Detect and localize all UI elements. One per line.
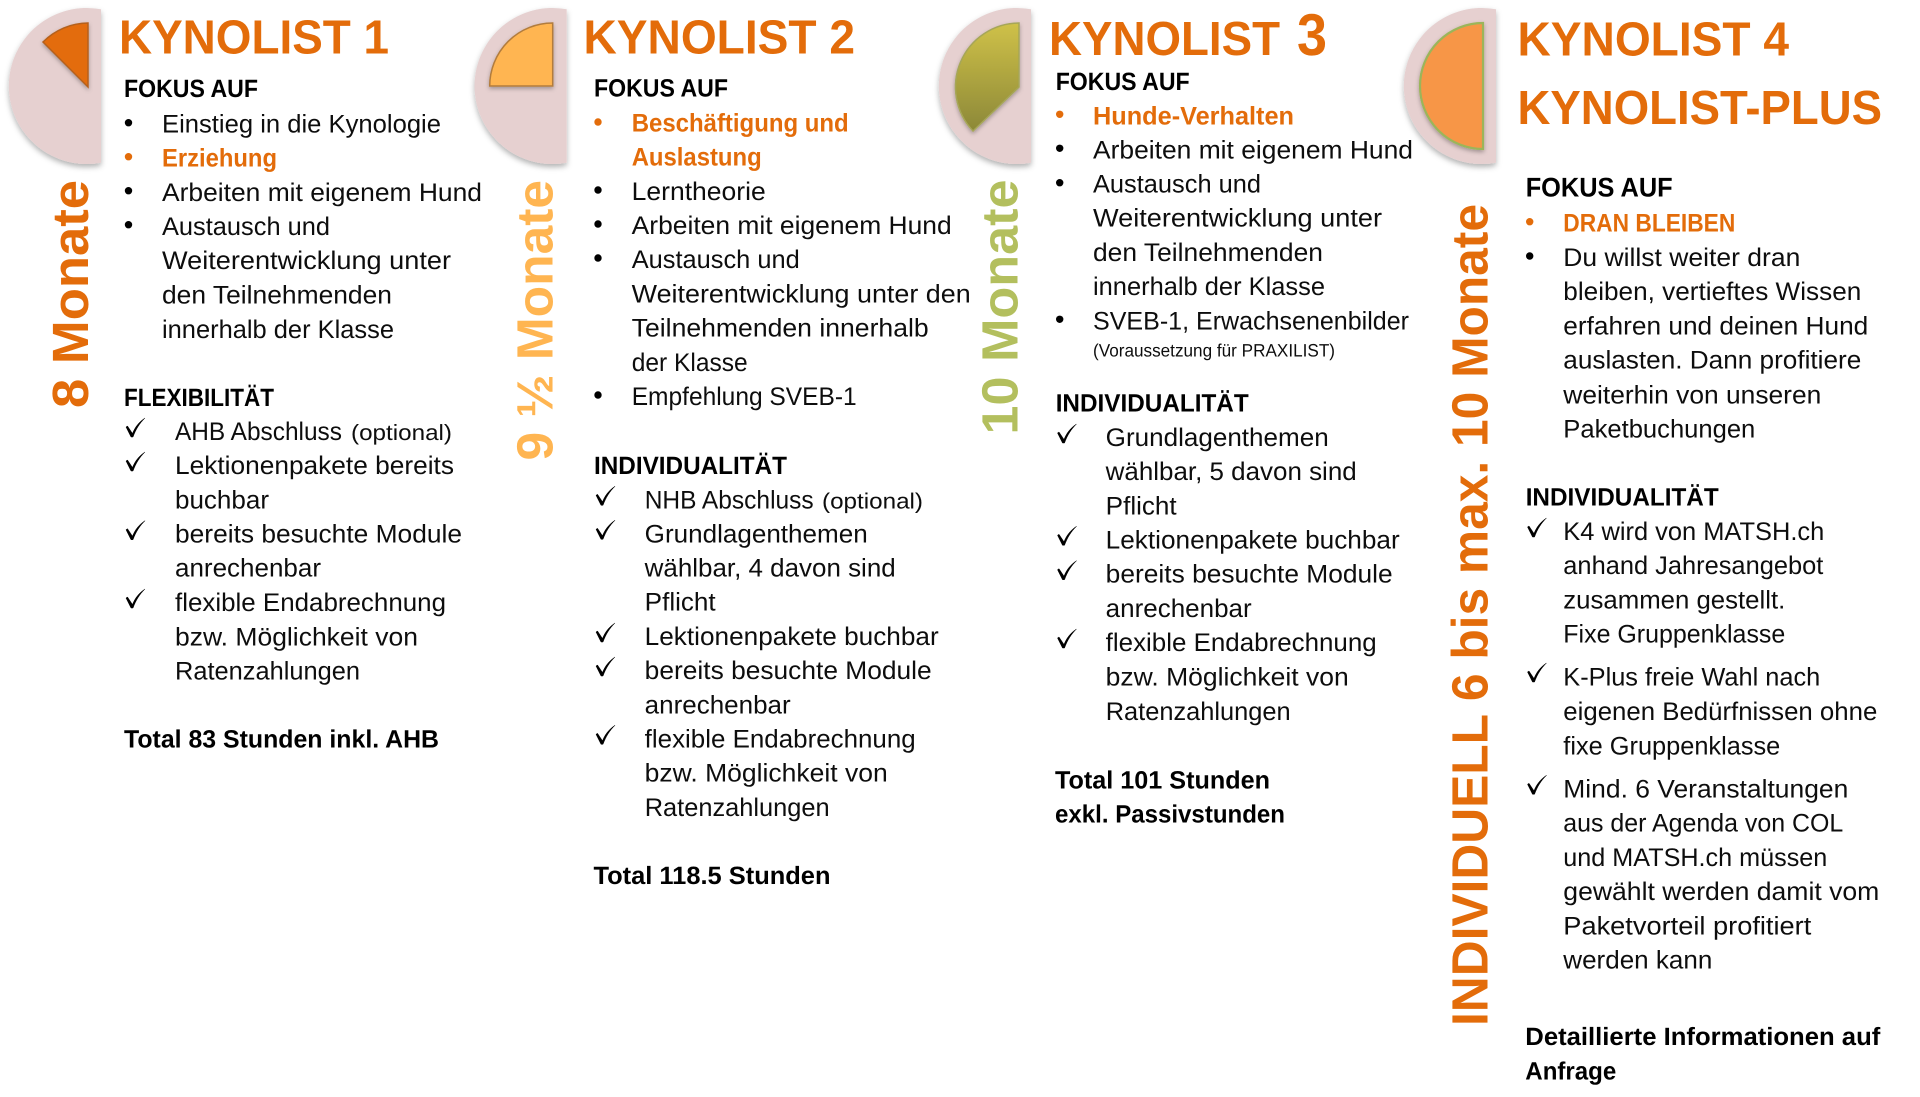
checklist: Individualität: K-Plus freie Wahl nach <box>1563 664 1820 692</box>
title: Kynolist 1: KYNOLIST 1 <box>119 12 389 64</box>
heading: Individualität: INDIVIDUALITÄT <box>1526 484 1719 512</box>
list: Fokus: Weiterentwicklung unter <box>1093 205 1383 233</box>
checklist: Flexibilität: bzw. Möglichkeit von <box>175 624 418 652</box>
title: Kynolist 3: 3 <box>1297 2 1327 68</box>
icon: pie 9.5 months <box>475 8 567 164</box>
list: Fokus <box>1056 102 1413 361</box>
list: Fokus: erfahren und deinen Hund <box>1563 312 1868 340</box>
list: Fokus: bleiben, vertieftes Wissen <box>1563 278 1861 306</box>
checklist: Individualität: bereits besuchte Module <box>645 657 932 685</box>
checklist: Flexibilität: bereits besuchte Module <box>175 521 462 549</box>
title: Kynolist 2: KYNOLIST 2 <box>584 12 855 64</box>
checklist: Individualität: (optional) <box>822 488 923 513</box>
list: Fokus: Paketbuchungen <box>1563 415 1755 443</box>
list: Fokus: Erziehung <box>162 144 277 172</box>
checklist: Individualität: gewählt werden damit vom <box>1563 878 1879 906</box>
list: Fokus: Arbeiten mit eigenem Hund <box>632 212 952 240</box>
list: Fokus: der Klasse <box>632 349 748 377</box>
list: Fokus: den Teilnehmenden <box>1093 239 1323 267</box>
icon: pie 10 months <box>939 8 1031 164</box>
total: 101 Stunden: Total 101 Stunden <box>1055 766 1270 794</box>
checklist: Individualität: Fixe Gruppenklasse <box>1563 621 1785 649</box>
list: Fokus: (Voraussetzung für PRAXILIST) <box>1093 341 1335 361</box>
list: Fokus: Austausch und <box>162 213 330 241</box>
checklist: Individualität: wählbar, 5 davon sind <box>1105 458 1357 486</box>
list: Fokus <box>594 110 971 411</box>
heading: Individualität: INDIVIDUALITÄT <box>594 452 787 480</box>
checklist: Flexibilität: flexible Endabrechnung <box>175 589 446 617</box>
checklist: Flexibilität: anrechenbar <box>175 555 322 583</box>
panel: Kynolist 4 and Kynolist-Plus <box>1404 8 1882 1085</box>
list: Fokus: DRAN BLEIBEN <box>1563 210 1735 238</box>
checklist: Flexibilität: AHB Abschluss <box>175 418 342 446</box>
list: Fokus: Auslastung <box>632 144 762 172</box>
icon: pie 8 months <box>9 8 101 164</box>
checklist: Individualität <box>1528 518 1879 974</box>
note: detailed information: Anfrage <box>1525 1057 1616 1085</box>
panel: Kynolist 3 <box>939 2 1413 829</box>
checklist: Individualität: bereits besuchte Module <box>1106 561 1393 589</box>
duration: 9 1/2 Monate: 9 ½ Monate <box>507 180 564 460</box>
checklist: Individualität: Lektionenpakete buchbar <box>645 623 939 651</box>
list: Fokus: Hunde-Verhalten <box>1093 102 1294 130</box>
total: 101 Stunden <box>1055 766 1285 829</box>
duration: individuell 6 bis max. 10 Monate: INDIVIDUELL 6 bis max. 10 Monate <box>1442 204 1499 1026</box>
checklist: Flexibilität: buchbar <box>175 487 270 515</box>
checklist: Individualität: aus der Agenda von COL <box>1563 810 1843 838</box>
checklist: Flexibilität: Ratenzahlungen <box>175 658 360 686</box>
checklist: Individualität: wählbar, 4 davon sind <box>644 555 896 583</box>
checklist: Flexibilität <box>126 418 462 686</box>
panel: Kynolist 1 <box>9 8 482 754</box>
list: Fokus: Teilnehmenden innerhalb <box>632 315 929 343</box>
title: Kynolist 4 / Kynolist-Plus <box>1518 14 1882 135</box>
total: 101 Stunden: exkl. Passivstunden <box>1055 801 1285 829</box>
list: Fokus: Einstieg in die Kynologie <box>162 110 441 138</box>
note: detailed information: Detaillierte Informationen auf <box>1525 1023 1881 1051</box>
icon: half pie individual <box>1404 8 1496 164</box>
list: Fokus: weiterhin von unseren <box>1562 381 1821 409</box>
list: Fokus: Beschäftigung und <box>632 110 849 138</box>
list: Fokus: Arbeiten mit eigenem Hund <box>162 179 482 207</box>
heading: Flexibilität: FLEXIBILITÄT <box>124 384 274 412</box>
title: Kynolist 4 / Kynolist-Plus: KYNOLIST-PLUS <box>1518 82 1882 135</box>
heading: Fokus auf: FOKUS AUF <box>594 75 728 103</box>
checklist: Flexibilität: Lektionenpakete bereits <box>175 452 454 480</box>
checklist: Individualität: K4 wird von MATSH.ch <box>1563 518 1824 546</box>
checklist: Individualität: eigenen Bedürfnissen ohne <box>1563 698 1877 726</box>
note: detailed information <box>1525 1023 1881 1085</box>
checklist: Individualität: bzw. Möglichkeit von <box>645 760 888 788</box>
total: 83 Stunden: Total 83 Stunden inkl. AHB <box>124 726 439 754</box>
checklist: Individualität <box>1058 424 1400 726</box>
list: Fokus: Austausch und <box>1093 171 1261 199</box>
total: 118.5 Stunden: Total 118.5 Stunden <box>594 862 830 890</box>
checklist: Individualität: fixe Gruppenklasse <box>1563 732 1780 760</box>
list: Fokus: Weiterentwicklung unter <box>162 247 452 275</box>
checklist: Individualität: Lektionenpakete buchbar <box>1106 526 1400 554</box>
list: Fokus: Weiterentwicklung unter den <box>632 281 971 309</box>
checklist: Individualität: und MATSH.ch müssen <box>1563 844 1827 872</box>
list: Fokus: Du willst weiter dran <box>1563 244 1800 272</box>
checklist: Individualität: Mind. 6 Veranstaltungen <box>1563 775 1848 803</box>
checklist: Individualität: Grundlagenthemen <box>1106 424 1329 452</box>
list: Fokus: Empfehlung SVEB-1 <box>632 383 857 411</box>
checklist: Individualität: bzw. Möglichkeit von <box>1106 663 1349 691</box>
list: Fokus: Arbeiten mit eigenem Hund <box>1093 136 1413 164</box>
checklist: Individualität: flexible Endabrechnung <box>645 725 916 753</box>
checklist: Individualität: flexible Endabrechnung <box>1106 629 1377 657</box>
list: Fokus: Lerntheorie <box>632 178 766 206</box>
heading: Individualität: INDIVIDUALITÄT <box>1056 390 1249 418</box>
checklist: Individualität <box>596 486 939 822</box>
list: Fokus: innerhalb der Klasse <box>162 316 394 344</box>
checklist: Individualität: anrechenbar <box>1106 595 1252 623</box>
checklist: Individualität: anhand Jahresangebot <box>1563 552 1823 580</box>
heading: Fokus auf: FOKUS AUF <box>1526 173 1673 203</box>
panel: Kynolist 2 <box>475 8 971 890</box>
checklist: Individualität: Grundlagenthemen <box>645 520 868 548</box>
title: Kynolist 4 / Kynolist-Plus: KYNOLIST 4 <box>1518 14 1789 66</box>
checklist: Flexibilität: (optional) <box>351 420 452 445</box>
list: Fokus: den Teilnehmenden <box>162 282 392 310</box>
checklist: Individualität: Pflicht <box>645 589 716 617</box>
checklist: Individualität: anrechenbar <box>645 691 791 719</box>
list: Fokus: Austausch und <box>632 246 800 274</box>
duration: 8 Monate: 8 Monate <box>42 180 99 408</box>
checklist: Individualität: zusammen gestellt. <box>1563 586 1785 614</box>
duration: 10 Monate: 10 Monate <box>972 180 1029 434</box>
checklist: Individualität: Paketvorteil profitiert <box>1563 912 1811 940</box>
list: Fokus: auslasten. Dann profitiere <box>1563 346 1861 374</box>
list: Fokus: innerhalb der Klasse <box>1093 273 1325 301</box>
list: Fokus <box>125 110 482 344</box>
checklist: Individualität: Pflicht <box>1106 492 1177 520</box>
checklist: Individualität: werden kann <box>1562 946 1712 974</box>
list: Fokus <box>1526 210 1868 443</box>
checklist: Individualität: NHB Abschluss <box>645 486 814 514</box>
heading: Fokus auf: FOKUS AUF <box>1056 68 1190 96</box>
title: Kynolist 3: KYNOLIST <box>1049 13 1280 66</box>
list: Fokus: SVEB-1, Erwachsenenbilder <box>1093 307 1409 335</box>
checklist: Individualität: Ratenzahlungen <box>1106 698 1291 726</box>
checklist: Individualität: Ratenzahlungen <box>645 794 830 822</box>
heading: Fokus auf: FOKUS AUF <box>124 75 258 103</box>
